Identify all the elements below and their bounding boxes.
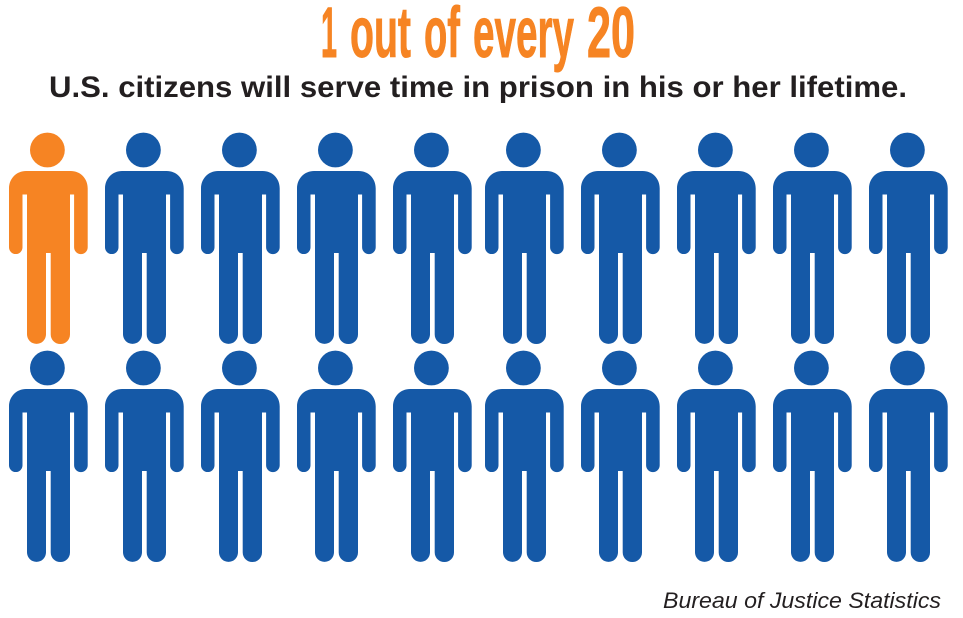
- pictogram: 1 of 20 people highlighted: [9, 133, 948, 562]
- row 1: blue people: [105, 133, 948, 344]
- row 2: blue people: [9, 351, 948, 562]
- title: [321, 0, 635, 73]
- source credit: Bureau of Justice Statistics: [663, 588, 941, 613]
- subtitle: U.S. citizens will serve time in prison in his or her lifetime.: [49, 71, 907, 104]
- icon: orange person: [9, 133, 88, 344]
